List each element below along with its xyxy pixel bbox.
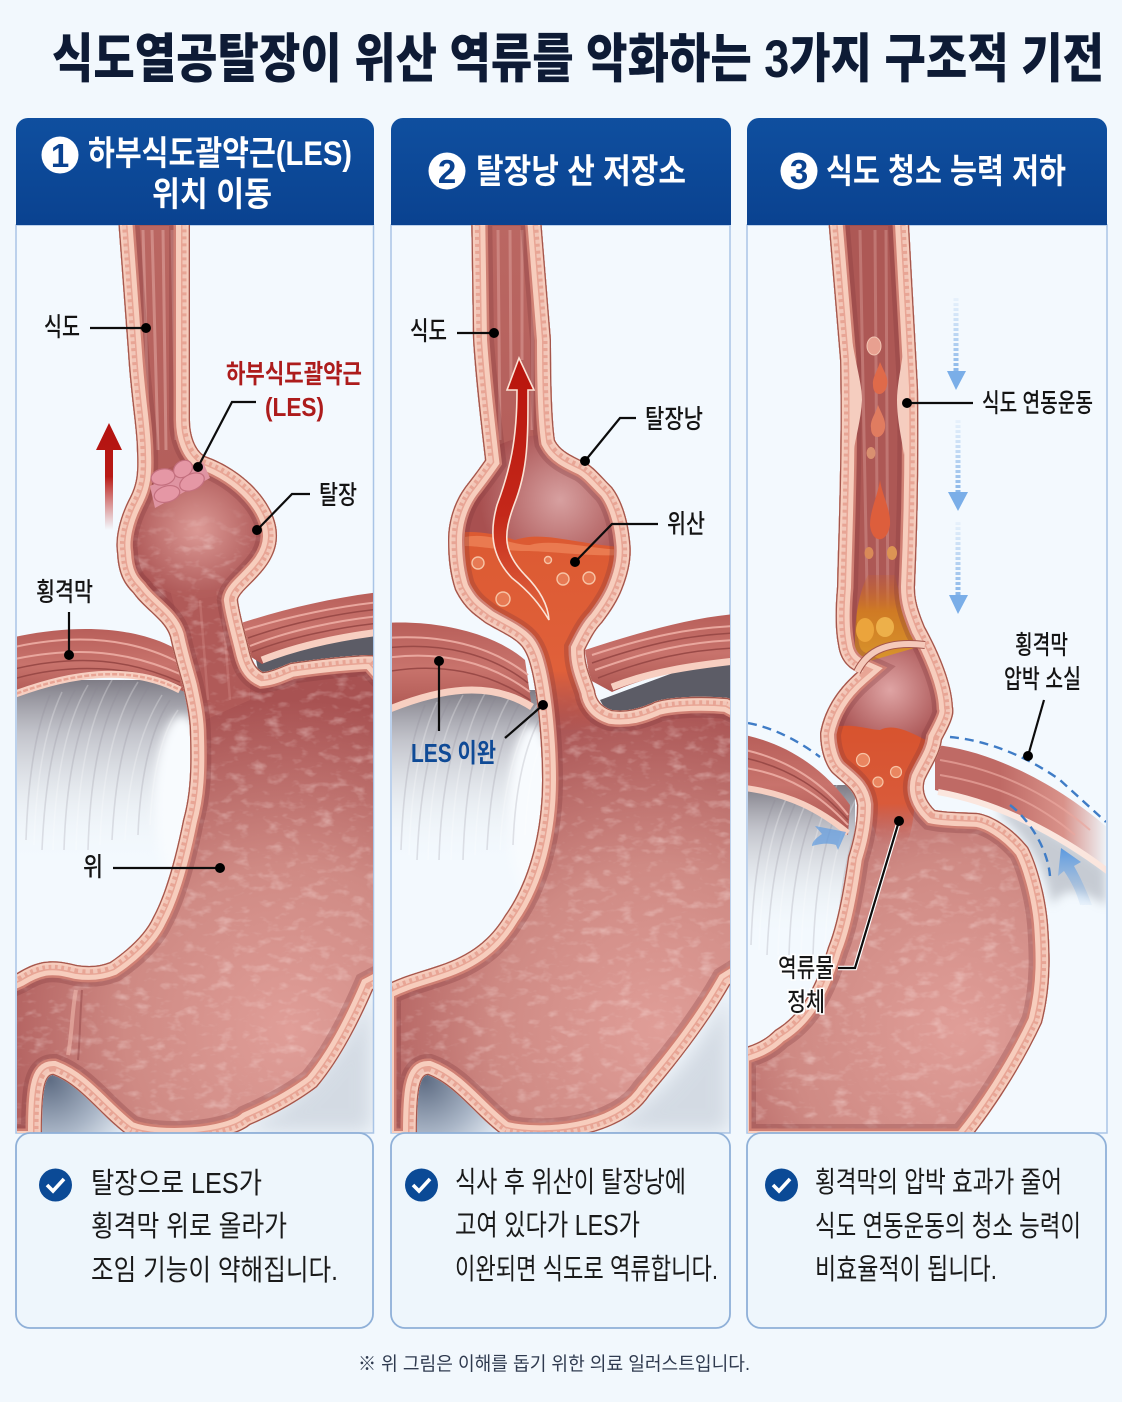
upward red arrow bbox=[96, 423, 122, 530]
panel 1 header: 1 bbox=[51, 137, 69, 174]
label: 식도 연동운동 bbox=[902, 388, 1093, 418]
shading below diaphragm bbox=[385, 650, 735, 1135]
pylorus fold bbox=[68, 990, 76, 1055]
diaphragm right band bbox=[585, 614, 735, 692]
diaphragm left band bbox=[10, 629, 185, 700]
panel 2 anatomy illustration bbox=[392, 225, 730, 1133]
panel 3 header bbox=[747, 118, 1107, 225]
panel 1 caption: 조임 기능이 약해집니다. bbox=[91, 1254, 338, 1287]
peristalsis arrows bbox=[947, 298, 968, 614]
diaphragm left band bbox=[385, 622, 532, 714]
panel 3 anatomy illustration bbox=[735, 205, 1110, 1145]
label: 하부식도괄약근 (LES) bbox=[193, 359, 362, 472]
curved reflux arrow bbox=[493, 358, 549, 620]
label: 식도 bbox=[44, 312, 151, 342]
label: 역류물 정체 bbox=[778, 816, 904, 1017]
panel 1 caption: 탈장으로 LES가 bbox=[91, 1167, 262, 1200]
label: 하부식도괄약근 (LES): (LES) bbox=[265, 392, 324, 422]
panel 2 caption bbox=[391, 1133, 730, 1328]
label: 식도 bbox=[410, 316, 499, 346]
label: 탈장 bbox=[252, 480, 357, 535]
panel 1 illustration background bbox=[16, 225, 374, 1133]
acid bubbles bbox=[472, 556, 595, 606]
label: 탈장낭 bbox=[580, 404, 703, 466]
panel 3 caption: 비효율적이 됩니다. bbox=[815, 1253, 997, 1286]
label: 횡격막 pointer bbox=[434, 656, 444, 731]
label: LES 이완 bbox=[411, 700, 548, 768]
label: 횡격막 압박 소실: 횡격막 bbox=[1015, 630, 1068, 660]
label: 탈장낭: 탈장낭 bbox=[645, 404, 703, 434]
panel 1 header: 하부식도괄약근(LES) bbox=[88, 135, 352, 173]
label: 식도: 식도 bbox=[44, 312, 80, 342]
panel 3 caption bbox=[747, 1133, 1106, 1328]
diaphragm right band bbox=[242, 592, 373, 664]
label: 횡격막 bbox=[36, 577, 93, 660]
panel 3 illustration background bbox=[747, 225, 1107, 1133]
panel 1 caption bbox=[16, 1133, 373, 1328]
panel 1 anatomy illustration bbox=[17, 225, 373, 1133]
panel 1 caption: 횡격막 위로 올라가 bbox=[91, 1210, 287, 1243]
label: 하부식도괄약근 (LES): 하부식도괄약근 bbox=[226, 359, 362, 389]
label: 횡격막 압박 소실: 압박 소실 bbox=[1004, 664, 1081, 694]
label: 횡격막 압박 소실 bbox=[1004, 630, 1081, 761]
panel 1: LES position shift bbox=[15, 118, 374, 1329]
blue pressure arrow right bbox=[1058, 848, 1092, 905]
blue pressure arrow left bbox=[812, 826, 846, 850]
label: 탈장: 탈장 bbox=[319, 480, 357, 510]
panel 1 header bbox=[16, 118, 374, 225]
peristaltic wall thickening bbox=[852, 344, 904, 454]
shading below diaphragm bbox=[10, 625, 380, 1135]
stomach and esophagus with stasis bbox=[748, 225, 1050, 1133]
stomach and esophagus with acid bbox=[392, 225, 730, 1133]
diaphragm right band bbox=[935, 745, 1110, 873]
label: 식도: 식도 bbox=[410, 316, 447, 346]
label: LES 이완: LES 이완 bbox=[411, 738, 496, 768]
label: 위: 위 bbox=[83, 852, 103, 882]
panel 2 header bbox=[391, 118, 731, 225]
label: 위 bbox=[83, 852, 225, 882]
panel 3 header: 3 bbox=[790, 153, 808, 190]
panel 2: hernia sac acid reservoir bbox=[390, 118, 731, 1329]
label: 위산: 위산 bbox=[667, 509, 705, 539]
panel 1 header: 위치 이동 bbox=[152, 176, 272, 214]
panel 2 caption: 고여 있다가 LES가 bbox=[455, 1210, 640, 1242]
stomach and esophagus bbox=[17, 225, 373, 1133]
panel 3 header: 식도 청소 능력 저하 bbox=[826, 153, 1066, 191]
label: 횡격막: 횡격막 bbox=[36, 577, 93, 607]
panel 2 header: 탈장낭 산 저장소 bbox=[476, 153, 686, 191]
panel 2 illustration background bbox=[391, 225, 730, 1133]
label: 역류물 정체: 역류물 bbox=[778, 953, 834, 983]
refluxate droplets bbox=[856, 337, 897, 642]
lost compression dashed contours bbox=[748, 723, 1106, 876]
LES sphincter ring bbox=[150, 457, 210, 508]
footnote: ※ 위 그림은 이해를 돕기 위한 의료 일러스트입니다. bbox=[358, 1353, 750, 1375]
label: 역류물 정체: 정체 bbox=[787, 987, 825, 1017]
hernia acid bubbles bbox=[856, 754, 902, 787]
label: 위산 bbox=[570, 509, 705, 567]
shading below diaphragm bbox=[745, 785, 1106, 955]
panel 2 header: 2 bbox=[438, 153, 456, 190]
fold between esophagus and hernia bbox=[857, 644, 925, 672]
diaphragm left band bbox=[745, 735, 850, 835]
panel 2 caption: 식사 후 위산이 탈장낭에 bbox=[455, 1166, 686, 1199]
panel 3: reduced esophageal clearance bbox=[735, 118, 1110, 1328]
panel 2 caption: 이완되면 식도로 역류합니다. bbox=[455, 1253, 718, 1286]
